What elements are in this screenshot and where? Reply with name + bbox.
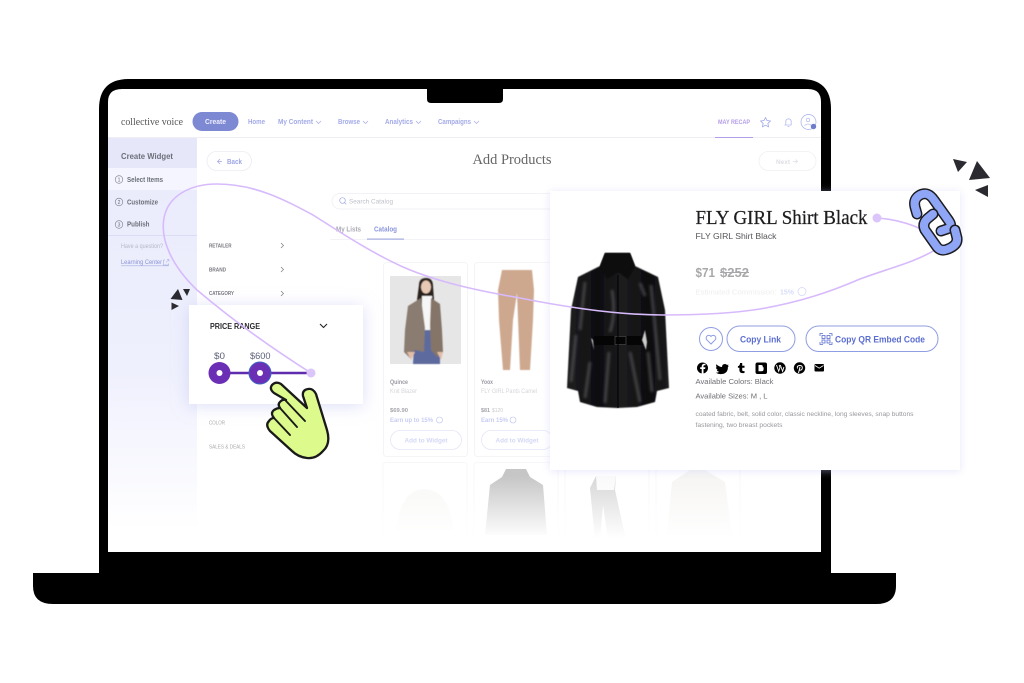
icon: pointing hand [267,383,328,458]
icon: chain link [915,194,957,250]
estimated commission: Estimated Commission: [696,288,776,296]
estimated commission: 15% [780,290,795,296]
sidebar: Have a question? [121,244,164,250]
product card: Quince blazer: $69.90 [390,408,408,414]
product title: FLY GIRL Shirt Black [696,208,868,229]
sidebar: 3 [118,222,121,228]
product description: fastening, two breast pockets [696,422,782,429]
sparkle triangles: top right [953,159,990,197]
black leather jacket [567,253,669,408]
top navigation bar: My Content [278,117,314,126]
page header: back, title, next: Next [776,159,791,166]
filter list [209,243,284,450]
price range heading: PRICE RANGE [210,322,260,331]
product card: Yoox pants [474,262,558,456]
top navigation bar: MAY RECAP [718,120,750,126]
top navigation bar: Browse [338,117,360,126]
top navigation bar: Create [205,119,226,126]
price slider labels [214,351,270,362]
button: copy QR embed code [806,326,938,352]
product card: Quince blazer: Knit Blazer [390,389,417,395]
price slider [208,362,316,384]
prices: $71 [696,265,715,280]
laptop [33,79,896,604]
top navigation bar: Home [248,117,265,126]
price range panel [189,305,363,404]
product detail panel [550,191,960,470]
sidebar: 2 [118,200,121,206]
price slider labels: $0 [214,351,225,362]
button: copy QR embed code: Copy QR Embed Code [835,334,925,344]
product card: Yoox pants: Earn 15% [481,417,508,424]
button: copy link [727,326,795,352]
connector dot at product title [872,214,882,222]
product card: Yoox pants: $81 [481,408,491,414]
product description [696,411,914,429]
sidebar [108,138,197,530]
product card: Quince blazer: Earn up to 15% [390,417,433,424]
price slider labels: $600 [250,351,270,362]
sparkle triangles: left [170,289,190,310]
available colours and sizes: Available Colors: Black [696,377,774,386]
product card: Yoox pants: $120 [492,408,503,414]
product card: Yoox pants: Yoox [481,380,494,386]
sidebar: 1 [118,177,121,183]
filter list: RETAILER [209,244,232,250]
prices [696,265,749,280]
filter list: SALES & DEALS [209,444,245,450]
product card: Quince blazer: Quince [390,380,409,386]
available colours and sizes [696,377,774,400]
product description: coated fabric, belt, solid color, classic neckline, long sleeves, snap buttons [696,411,914,418]
product subtitle: FLY GIRL Shirt Black [696,231,777,241]
page header: back, title, next: Add Products [472,152,552,168]
search and tabs: Catalog [374,226,397,234]
search and tabs: Search Catalog [349,198,393,206]
product card: Quince blazer: Add to Widget [404,438,448,444]
sidebar: Customize [127,198,158,206]
prices: $252 [720,265,749,280]
filter list: BRAND [209,268,226,274]
search and tabs [330,194,572,240]
available colours and sizes: Available Sizes: M , L [696,392,768,400]
top navigation bar: Analytics [385,117,413,126]
chevron: price range dropdown [320,324,327,328]
top navigation bar: Campaigns [438,117,471,126]
product card: Yoox pants: FLY GIRL Pants Camel [481,389,537,395]
button: favourite [700,328,722,350]
social share icons [697,362,824,374]
sidebar: Create Widget [121,151,173,161]
top navigation bar: collective voice [121,117,183,128]
connector curve [163,184,935,373]
product card: Yoox pants: Add to Widget [496,438,539,444]
search and tabs: My Lists [336,226,361,234]
filter list: CATEGORY [209,291,234,297]
button: copy link: Copy Link [740,334,782,344]
sidebar: Publish [127,220,150,228]
filter list: COLOR [209,420,225,426]
page header: back, title, next: Back [227,159,242,166]
sidebar: Select Items [127,175,163,184]
product card: Quince blazer [384,262,468,456]
sidebar: Learning Center [121,259,162,266]
top navigation bar [108,112,821,138]
faded lower product row [380,462,745,552]
page header: back, title, next [207,152,816,170]
